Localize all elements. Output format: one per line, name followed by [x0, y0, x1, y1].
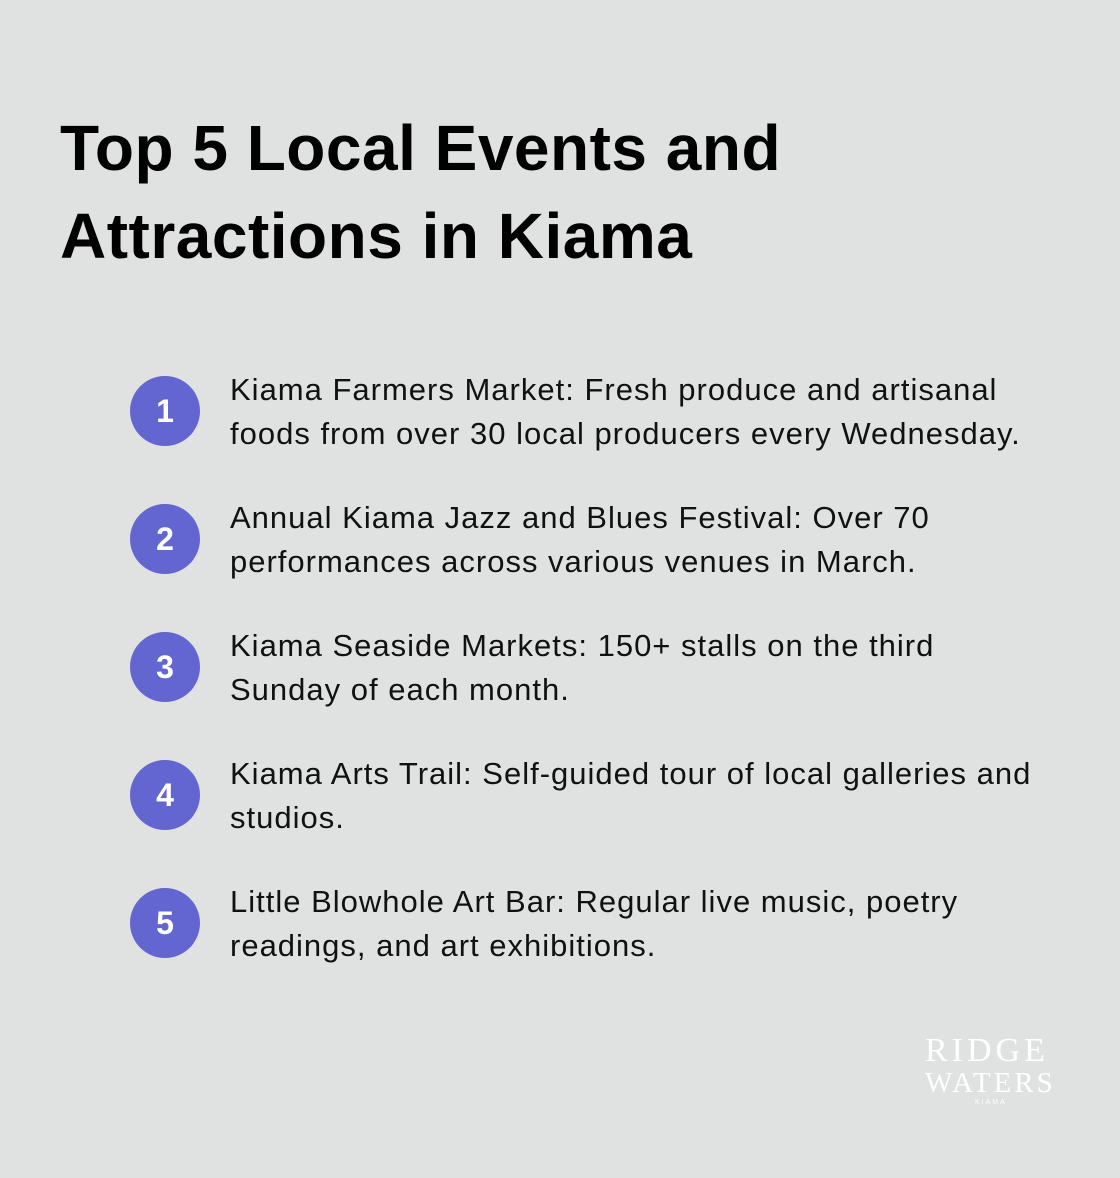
- text 2: Annual Kiama Jazz and Blues Festival: Over 70: [230, 500, 930, 535]
- text 4: Kiama Arts Trail: Self-guided tour of local galleries and: [230, 756, 1031, 791]
- logo: WATERS: [925, 1067, 1056, 1099]
- text 3: Sunday of each month.: [230, 672, 570, 707]
- text 3: Kiama Seaside Markets: 150+ stalls on the third: [230, 628, 934, 663]
- item 2: [130, 500, 930, 579]
- badge 5: [130, 888, 200, 958]
- item 4: [130, 756, 1031, 835]
- badge 2: [130, 504, 200, 574]
- badge 3: [130, 632, 200, 702]
- title: Top 5 Local Events and: [60, 112, 781, 184]
- text 5: [230, 884, 958, 963]
- logo: [925, 1032, 1056, 1106]
- item 1: [130, 372, 1021, 451]
- text 1: foods from over 30 local producers every Wednesday.: [230, 416, 1021, 451]
- text 2: performances across various venues in March.: [230, 544, 917, 579]
- text 1: Kiama Farmers Market: Fresh produce and artisanal: [230, 372, 997, 407]
- text 3: [230, 628, 934, 707]
- text 4: studios.: [230, 800, 345, 835]
- text 4: [230, 756, 1031, 835]
- item 5: [130, 884, 958, 963]
- badge 2: 2: [156, 521, 174, 557]
- badge 5: 5: [156, 905, 174, 941]
- logo: KIAMA: [975, 1099, 1007, 1106]
- badge 1: [130, 376, 200, 446]
- title: Attractions in Kiama: [60, 200, 692, 272]
- item 3: [130, 628, 934, 707]
- text 5: Little Blowhole Art Bar: Regular live music, poetry: [230, 884, 958, 919]
- title: [60, 112, 781, 272]
- badge 4: [130, 760, 200, 830]
- text 2: [230, 500, 930, 579]
- badge 3: 3: [156, 649, 174, 685]
- text 5: readings, and art exhibitions.: [230, 928, 656, 963]
- badge 4: 4: [156, 777, 174, 813]
- logo: RIDGE: [925, 1032, 1049, 1069]
- text 1: [230, 372, 1021, 451]
- badge 1: 1: [156, 393, 174, 429]
